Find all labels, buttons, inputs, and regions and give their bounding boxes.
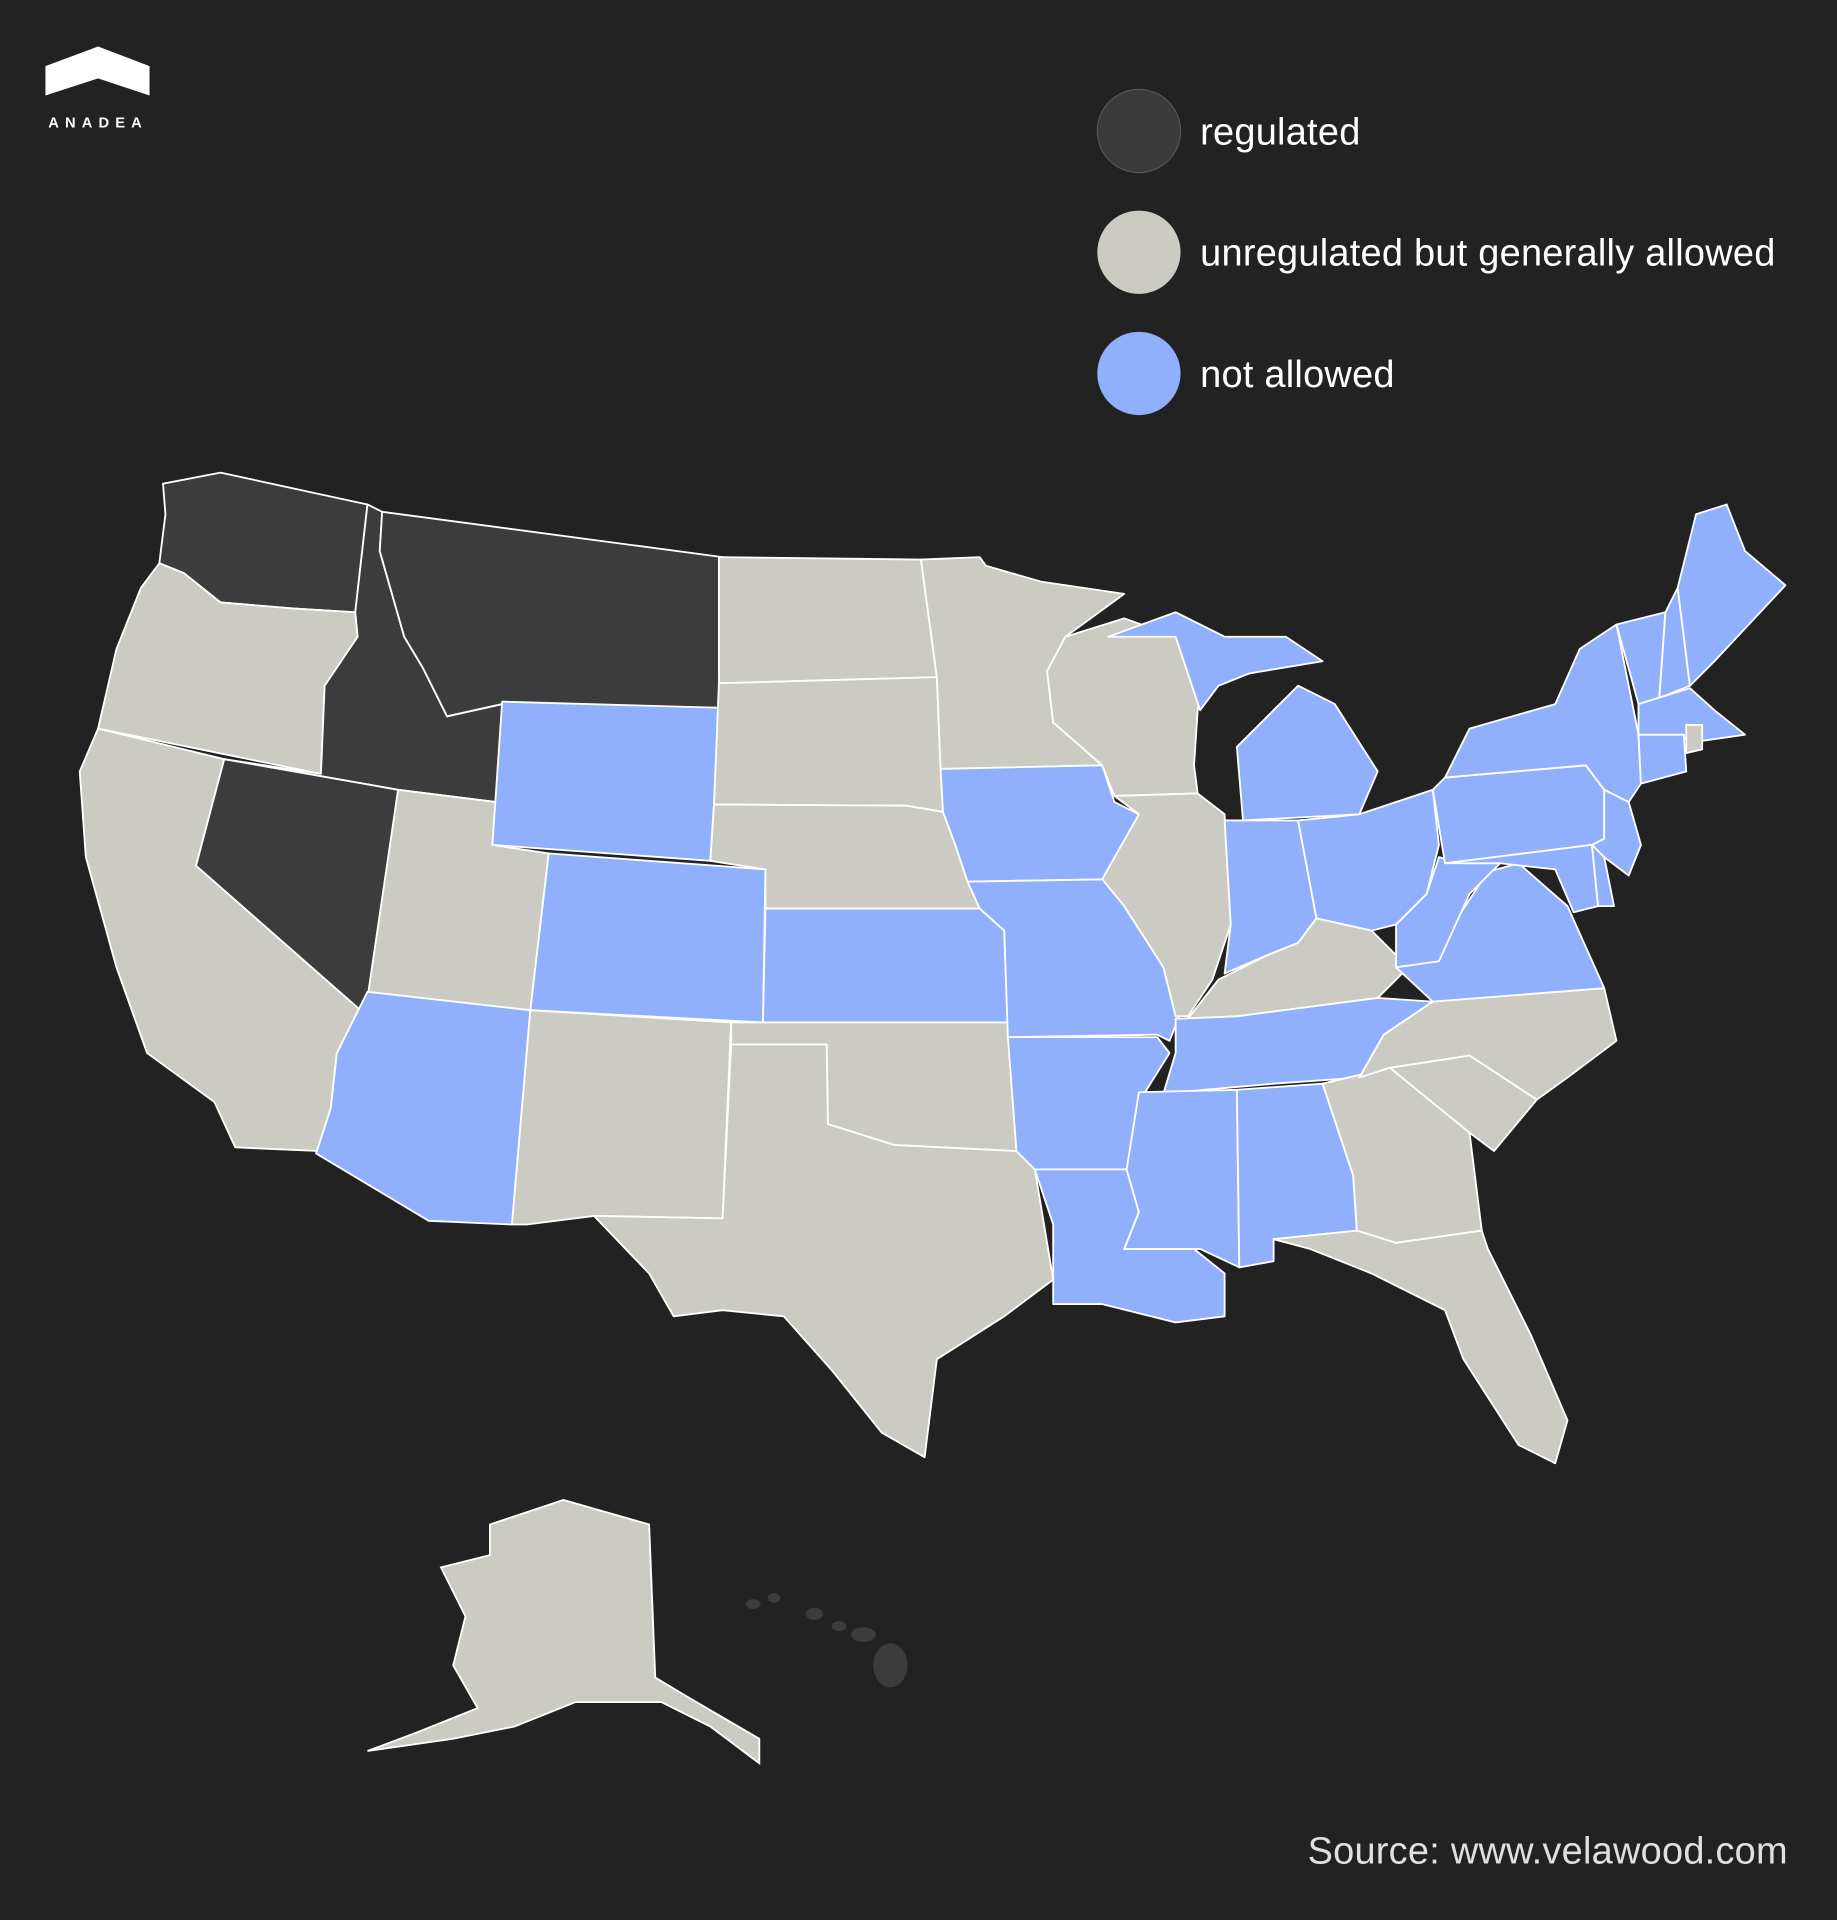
legend item: regulated <box>1097 89 1361 173</box>
map: Alaska <box>367 1500 759 1763</box>
legend item: not allowed: not allowed <box>1200 354 1395 396</box>
legend item: not allowed <box>1097 332 1395 415</box>
logo: ANADEA <box>48 115 148 131</box>
legend item: unregulated <box>1097 211 1776 294</box>
source: Source: www.velawood.com <box>1308 1831 1788 1873</box>
legend item: regulated: regulated <box>1200 111 1361 153</box>
logo <box>45 47 150 131</box>
map: contiguous US <box>80 473 1785 1463</box>
legend <box>1097 89 1776 415</box>
legend item: unregulated: unregulated but generally allowed <box>1200 233 1776 275</box>
map: Hawaii <box>746 1593 907 1687</box>
